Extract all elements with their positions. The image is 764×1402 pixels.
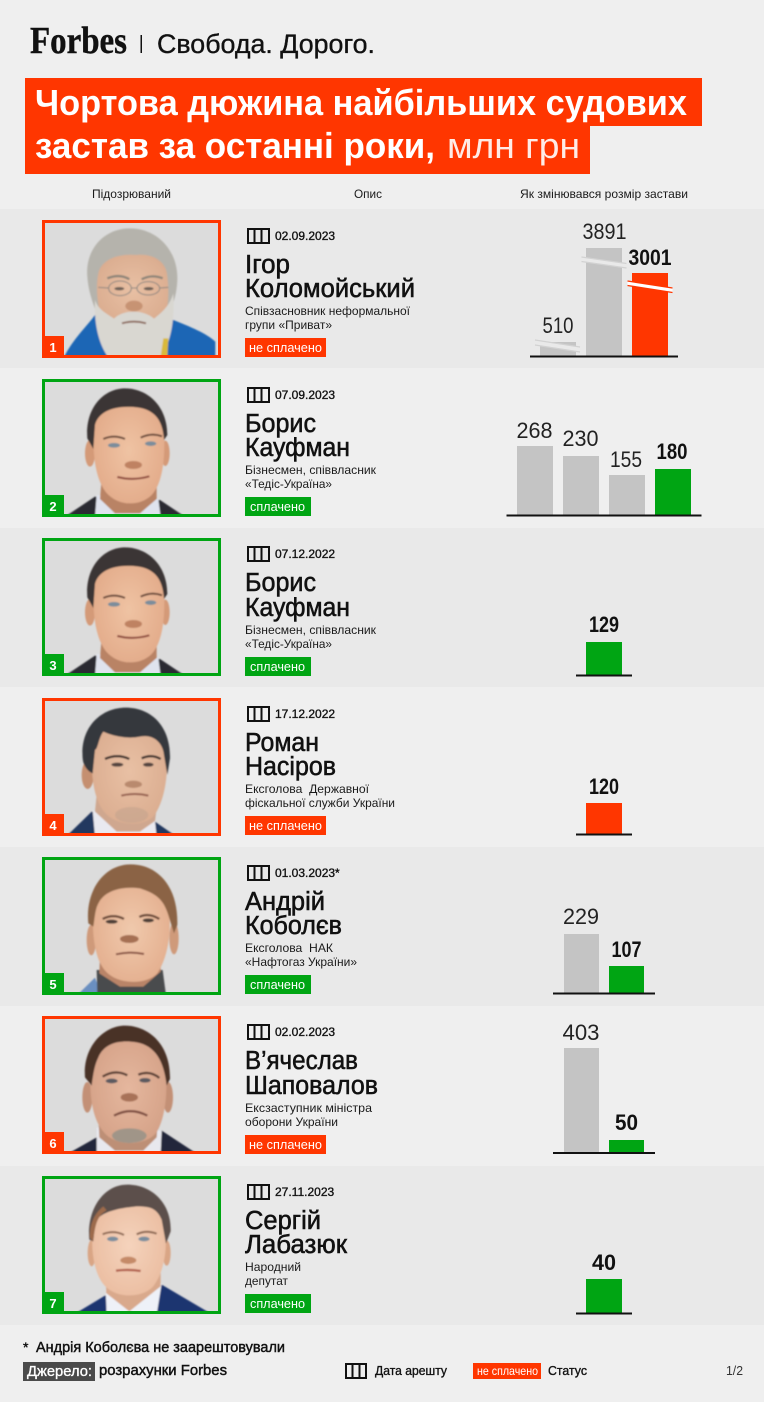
portrait 4 bbox=[42, 700, 220, 837]
name bbox=[245, 1207, 348, 1259]
icon: arrest date bbox=[248, 1025, 269, 1039]
status badge bbox=[245, 1294, 311, 1313]
description bbox=[245, 1101, 372, 1129]
status badge: не сплачено bbox=[249, 341, 322, 355]
footnote: * bbox=[23, 1339, 29, 1355]
title: Чортова дюжина найбільших судових bbox=[35, 82, 687, 123]
portrait 3 bbox=[42, 540, 220, 676]
bar chart bbox=[530, 219, 678, 358]
bar chart bbox=[576, 612, 632, 676]
rank 7: 7 bbox=[49, 1296, 57, 1311]
description bbox=[245, 1260, 301, 1288]
bar chart bbox=[576, 1250, 632, 1314]
status badge bbox=[245, 338, 326, 357]
name: Коболєв bbox=[245, 912, 342, 940]
rank 5 bbox=[42, 973, 64, 995]
name: Кауфман bbox=[245, 434, 350, 462]
panel: row 2 Кауфман bbox=[42, 380, 702, 517]
bar chart: 510 bbox=[542, 313, 574, 338]
bar chart bbox=[553, 904, 655, 994]
icon: arrest date bbox=[248, 388, 269, 402]
description: «Тедіс-Україна» bbox=[245, 477, 332, 491]
description bbox=[245, 782, 395, 810]
description: Ексзаступник міністра bbox=[245, 1101, 372, 1115]
name bbox=[245, 251, 415, 303]
name: Насіров bbox=[245, 753, 336, 781]
rank 7 bbox=[42, 1292, 64, 1314]
bar chart: 180 bbox=[656, 439, 688, 464]
column headings bbox=[92, 187, 688, 201]
bar chart: 40 bbox=[592, 1250, 616, 1275]
legend: status: не сплачено bbox=[477, 1364, 538, 1378]
status badge: сплачено bbox=[250, 978, 305, 992]
name: Кауфман bbox=[245, 594, 350, 622]
slogan: Свобода. Дорого. bbox=[157, 29, 375, 59]
description bbox=[245, 941, 357, 969]
description: Ексголова Державної bbox=[245, 782, 370, 796]
panel: row 3 Кауфман bbox=[42, 538, 632, 676]
description: «Тедіс-Україна» bbox=[245, 637, 332, 651]
rank 2 bbox=[42, 495, 64, 517]
name: Лабазюк bbox=[245, 1231, 348, 1259]
description: Співзасновник неформальної bbox=[245, 304, 411, 318]
bar chart: 155 bbox=[610, 447, 642, 472]
date: 02.02.2023 bbox=[275, 1025, 335, 1039]
name bbox=[245, 1047, 378, 1100]
column headings: Як змінювався розмір застави bbox=[520, 187, 688, 201]
description: фіскальної служби України bbox=[245, 796, 395, 810]
status badge bbox=[245, 816, 326, 835]
name: Борис bbox=[245, 569, 316, 597]
legend: status bbox=[473, 1363, 587, 1379]
name: Андрій bbox=[245, 888, 325, 916]
rank 2: 2 bbox=[49, 499, 57, 514]
name: Сергій bbox=[245, 1207, 321, 1235]
status badge: сплачено bbox=[250, 660, 305, 674]
icon: arrest date bbox=[248, 707, 269, 721]
description: Народний bbox=[245, 1260, 301, 1274]
rank 3 bbox=[42, 654, 64, 676]
title: застав за останні роки, bbox=[35, 125, 435, 166]
bar chart: 50 bbox=[615, 1110, 638, 1135]
status badge bbox=[245, 497, 311, 516]
status badge bbox=[245, 1135, 326, 1154]
column headings: Опис bbox=[354, 187, 382, 201]
description bbox=[245, 304, 411, 332]
bar chart: 120 bbox=[589, 774, 619, 799]
legend: arrest date bbox=[346, 1363, 447, 1378]
legend: status: Статус bbox=[548, 1363, 587, 1378]
bar chart bbox=[576, 774, 632, 836]
rank 6 bbox=[42, 1132, 64, 1154]
panel: row 4 Насіров bbox=[42, 700, 632, 837]
description: Ексголова НАК bbox=[245, 941, 333, 955]
icon: arrest date bbox=[346, 1364, 366, 1378]
panel: row 5 Коболєв bbox=[42, 857, 655, 995]
legend: arrest date: Дата арешту bbox=[375, 1363, 447, 1378]
name: Ігор bbox=[245, 251, 290, 279]
description: «Нафтогаз України» bbox=[245, 955, 357, 969]
status badge: сплачено bbox=[250, 500, 305, 514]
portrait 1 bbox=[42, 222, 220, 358]
panel: row 7 Лабазюк bbox=[42, 1176, 632, 1314]
rank 4 bbox=[42, 814, 64, 836]
icon: arrest date bbox=[248, 229, 269, 243]
footnote: Андрія Коболєва не заарештовували bbox=[36, 1339, 285, 1356]
bar chart: 268 bbox=[516, 418, 552, 443]
bar chart: 107 bbox=[612, 937, 642, 962]
icon: arrest date bbox=[248, 1185, 269, 1199]
name bbox=[245, 888, 342, 940]
date: 07.12.2022 bbox=[275, 547, 335, 561]
name bbox=[245, 410, 350, 462]
logo: Forbes: Forbes bbox=[30, 20, 127, 62]
bar chart: 229 bbox=[563, 904, 599, 929]
title bbox=[25, 78, 702, 174]
description: Бізнесмен, співвласник bbox=[245, 623, 377, 637]
name: Роман bbox=[245, 729, 319, 757]
name: Борис bbox=[245, 410, 316, 438]
rank 6: 6 bbox=[49, 1136, 57, 1151]
bar chart: 403 bbox=[562, 1020, 600, 1045]
date: 02.09.2023 bbox=[275, 229, 335, 243]
header: logo and slogan bbox=[30, 20, 375, 62]
status badge bbox=[245, 657, 311, 676]
rank 3: 3 bbox=[49, 658, 57, 673]
rank 5: 5 bbox=[49, 977, 57, 992]
description: депутат bbox=[245, 1274, 288, 1288]
description: оборони України bbox=[245, 1115, 338, 1129]
description: Бізнесмен, співвласник bbox=[245, 463, 377, 477]
name: В’ячеслав bbox=[245, 1047, 358, 1075]
bar chart bbox=[553, 1020, 655, 1154]
portrait 5 bbox=[42, 858, 220, 995]
rank 4: 4 bbox=[49, 818, 57, 833]
status badge: сплачено bbox=[250, 1297, 305, 1311]
portrait 2 bbox=[42, 380, 220, 517]
status badge bbox=[245, 975, 311, 994]
status badge: не сплачено bbox=[249, 819, 322, 833]
name bbox=[245, 729, 336, 781]
description bbox=[245, 463, 377, 491]
title: млн грн bbox=[447, 125, 580, 166]
status badge: не сплачено bbox=[249, 1138, 322, 1152]
icon: arrest date bbox=[248, 866, 269, 880]
bar chart: 129 bbox=[589, 612, 619, 637]
description: групи «Приват» bbox=[245, 318, 332, 332]
date: 07.09.2023 bbox=[275, 388, 335, 402]
date: 17.12.2022 bbox=[275, 707, 335, 721]
bar chart: 230 bbox=[562, 426, 598, 451]
bar chart: 3001 bbox=[628, 245, 672, 270]
source bbox=[23, 1362, 227, 1381]
icon: arrest date bbox=[248, 547, 269, 561]
column headings: Підозрюваний bbox=[92, 187, 171, 201]
portrait 7 bbox=[42, 1178, 220, 1315]
name: Коломойський bbox=[245, 275, 415, 303]
portrait 6 bbox=[42, 1018, 220, 1154]
date: 01.03.2023* bbox=[275, 866, 340, 880]
panel: row 1 Коломойський bbox=[42, 220, 678, 358]
rank 1: 1 bbox=[49, 340, 57, 355]
page number: 1/2 bbox=[726, 1363, 743, 1378]
source: Джерело: bbox=[27, 1363, 92, 1380]
panel: row 6 Шаповалов bbox=[42, 1018, 655, 1154]
rank 1 bbox=[42, 336, 64, 358]
source: розрахунки Forbes bbox=[99, 1362, 227, 1379]
name: Шаповалов bbox=[245, 1072, 378, 1100]
bar chart bbox=[506, 418, 702, 516]
description bbox=[245, 623, 377, 651]
name bbox=[245, 569, 350, 622]
bar chart: 3891 bbox=[582, 219, 626, 244]
date: 27.11.2023 bbox=[275, 1185, 334, 1199]
